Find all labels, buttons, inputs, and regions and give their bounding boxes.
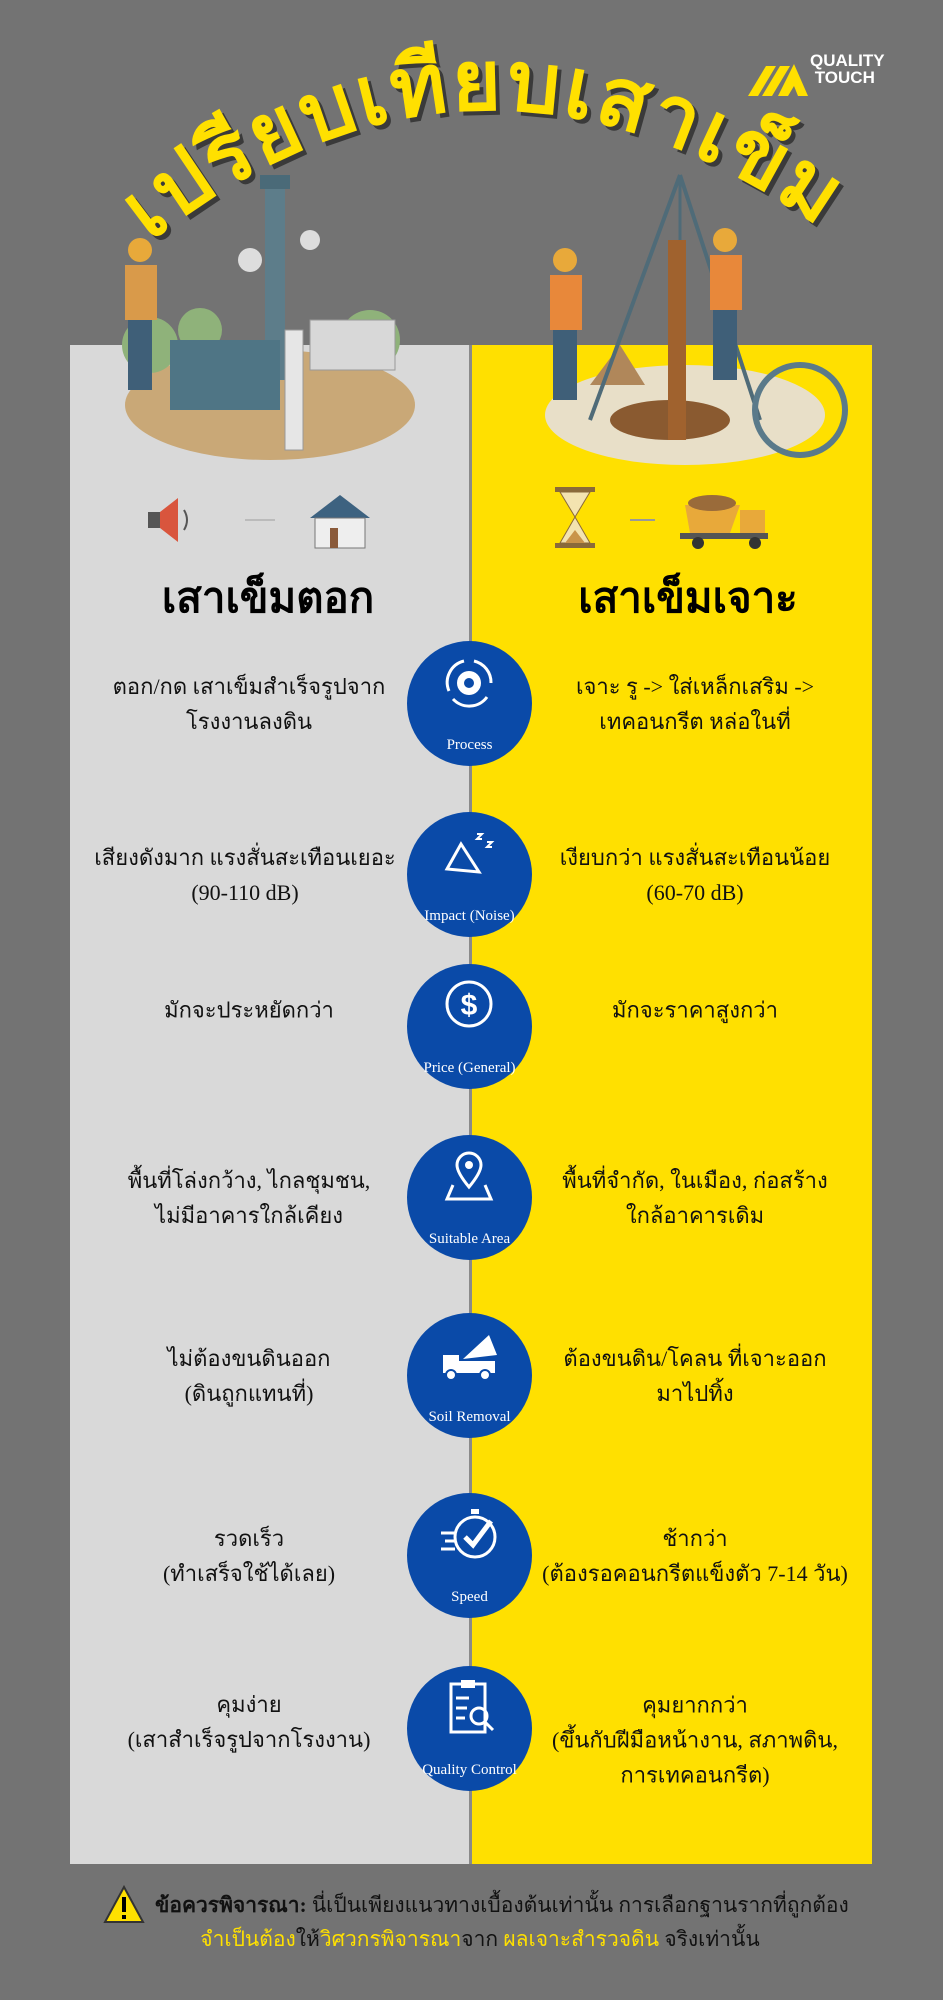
text: ต้องขนดิน/โคลน ที่เจาะออก [563,1346,827,1371]
row: speed: (ทำเสร็จใช้ได้เลย) [163,1561,335,1586]
logo: QUALITY [810,51,885,70]
row: suitable area: พื้นที่โล่งกว้าง, ไกลชุมชน, [128,1168,370,1193]
row: speed: รวดเร็ว [214,1526,284,1551]
title: เปรียบเทียบเสาเข็ม [136,44,844,240]
text: $ [461,989,478,1022]
heading: bored pile: เสาเข็มเจาะ [578,574,798,621]
text: Quality Control [422,1762,517,1778]
panel: left (driven pile) [70,345,470,1864]
text: การเทคอนกรีต) [620,1762,770,1788]
footer note [104,1885,849,1951]
row: quality control [128,1692,370,1753]
illustration: pile driving rig [122,175,415,460]
footer note: จำเป็นต้องให้วิศวกรพิจารณาจาก ผลเจาะสำรวจดิน จริงเท่านั้น [200,1927,760,1951]
row: process: ตอก/กด เสาเข็มสำเร็จรูปจาก [113,674,385,699]
row: impact noise: เสียงดังมาก แรงสั่นสะเทือนเยอะ [94,845,396,870]
row: soil removal [166,1346,330,1407]
icons: noise to house [148,495,370,548]
text: (60-70 dB) [646,880,744,905]
text: (ขึ้นกับฝีมือหน้างาน, สภาพดิน, [552,1728,838,1752]
panel: right (bored pile) [472,345,872,1864]
row: suitable area: ไม่มีอาคารใกล้เคียง [155,1203,343,1228]
logo [748,51,885,96]
text: มาไปทิ้ง [656,1381,734,1406]
text: Soil Removal [428,1409,511,1425]
row: impact noise: (90-110 dB) [191,880,299,905]
text: เจาะ รู -> ใส่เหล็กเสริม -> [576,674,814,699]
text: เงียบกว่า แรงสั่นสะเทือนน้อย [560,845,830,870]
row: impact noise [94,842,396,905]
text: ใกล้อาคารเดิม [626,1203,764,1228]
row: quality control: คุมง่าย [216,1692,282,1717]
text: พื้นที่จำกัด, ในเมือง, ก่อสร้าง [562,1168,828,1193]
text: เทคอนกรีต หล่อในที่ [599,709,791,734]
row: suitable area [128,1164,370,1228]
text: คุมยากกว่า [642,1692,748,1718]
row: process [113,674,385,734]
icons: hourglass to truck [555,487,768,549]
row: quality control: (เสาสำเร็จรูปจากโรงงาน) [128,1727,370,1752]
heading: driven pile: เสาเข็มตอก [162,574,374,621]
text: Suitable Area [429,1231,510,1247]
row: speed [163,1526,335,1586]
text: Speed [451,1589,488,1605]
text: มักจะราคาสูงกว่า [612,998,778,1022]
row: soil removal: (ดินถูกแทนที่) [185,1381,313,1406]
icon: warning [104,1885,144,1923]
row: process: โรงงานลงดิน [186,709,312,734]
title: เปรียบเทียบเสาเข็ม [124,40,840,236]
logo: TOUCH [815,68,875,87]
text: (ต้องรอคอนกรีตแข็งตัว 7-14 วัน) [542,1561,848,1586]
footer note: ข้อควรพิจารณา: นี่เป็นเพียงแนวทางเบื้องต้นเท่านั้น การเลือกฐานรากที่ถูกต้อง [155,1893,849,1917]
text: Impact (Noise) [424,908,515,924]
row: price: มักจะประหยัดกว่า [164,998,334,1022]
text: Process [447,737,492,753]
text: Price (General) [423,1060,516,1076]
illustration: bored pile auger [545,174,848,465]
text: ช้ากว่า [662,1526,728,1551]
row: soil removal: ไม่ต้องขนดินออก [168,1346,330,1371]
